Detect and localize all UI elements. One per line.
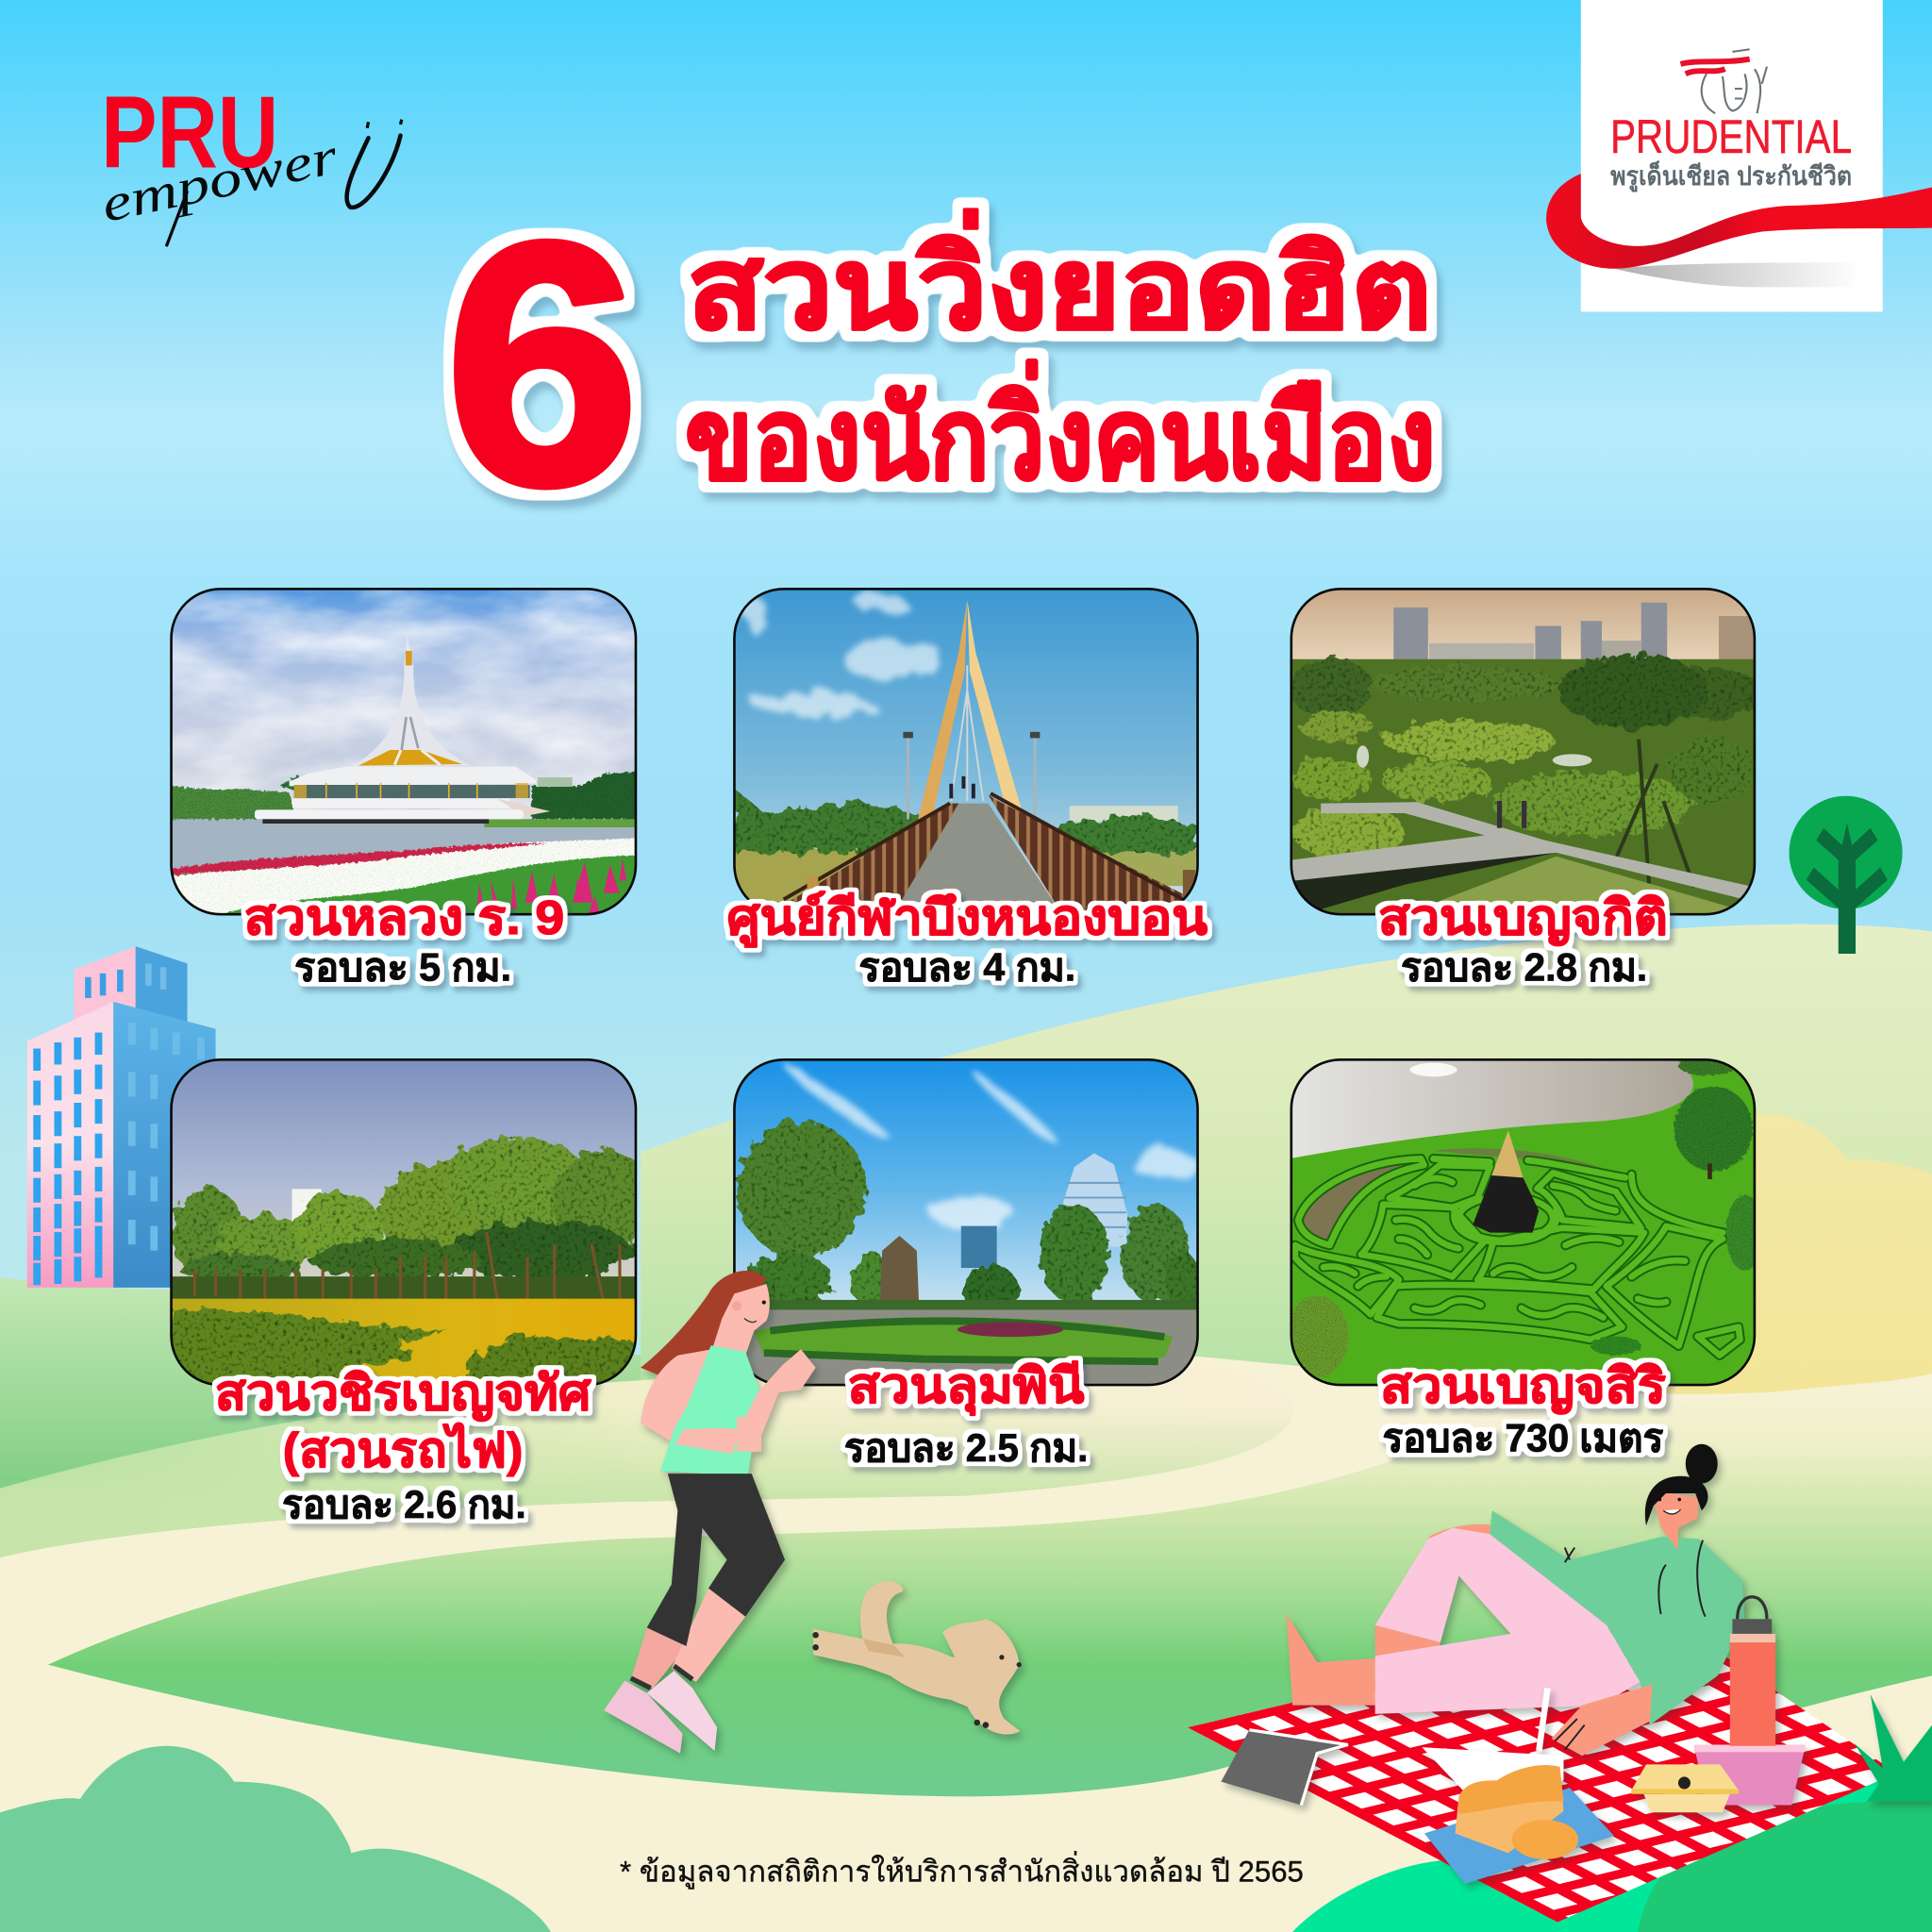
logo: PRU empower U xyxy=(96,75,402,246)
label: Wachirabenchathat xyxy=(215,1366,591,1526)
label: Benjasiri: รอบละ 730 เมตร xyxy=(1382,1416,1664,1460)
heading line 1: สวนวิ่งยอดฮิต xyxy=(688,208,1432,352)
label: Lumphini: สวนลุมพินี xyxy=(848,1358,1085,1415)
water bottle xyxy=(1730,1597,1775,1746)
label: Nong Bon: รอบละ 4 กม. xyxy=(858,945,1075,990)
label: Benjakitti xyxy=(1378,891,1668,990)
logo: Prudential: PRUDENTIAL xyxy=(1610,110,1852,163)
label: Nong Bon: ศูนย์กีฬาบึงหนองบอน xyxy=(727,891,1208,948)
icon: city buildings xyxy=(27,946,216,1288)
illustration: runner xyxy=(604,1271,816,1754)
label: Benjakitti: สวนเบญจกิติ xyxy=(1378,891,1668,945)
label: Lumphini: รอบละ 2.5 กม. xyxy=(844,1425,1088,1470)
illustration: picnic items xyxy=(1221,1597,1932,1884)
photo: Wachirabenchathat park xyxy=(170,1059,656,1385)
white paper and straw xyxy=(1422,1688,1563,1799)
label: Wachirabenchathat: (สวนรถไฟ) xyxy=(283,1422,523,1476)
bottom right hills xyxy=(1292,1779,1932,1932)
park labels row 2 xyxy=(215,1358,1667,1526)
big number 6: 6 xyxy=(445,172,640,557)
logo: Prudential: พรูเด็นเชียล ประกันชีวิต xyxy=(1610,159,1852,192)
plant xyxy=(1855,1694,1932,1802)
logo: PRU empower U: empower xyxy=(96,126,342,233)
yellow food box xyxy=(1631,1764,1739,1812)
park labels row 1 xyxy=(244,891,1668,990)
bread xyxy=(1456,1765,1578,1859)
label: Suan Luang Rama 9: รอบละ 5 กม. xyxy=(294,945,511,990)
label: Benjasiri xyxy=(1380,1358,1667,1460)
label: Wachirabenchathat: รอบละ 2.6 กม. xyxy=(282,1482,526,1526)
bush bottom left xyxy=(0,1746,551,1932)
logo: PRU empower U: PRU xyxy=(101,75,278,190)
photo: Suan Luang Rama 9 xyxy=(170,589,641,918)
logo: Prudential xyxy=(1546,0,1932,311)
icon: tree xyxy=(1789,796,1903,954)
title xyxy=(445,172,1436,557)
photo: Lumphini park xyxy=(734,1059,1200,1385)
label: Lumphini xyxy=(844,1358,1088,1470)
photo: Nong Bon sports centre bridge xyxy=(734,589,1198,914)
illustration: picnic woman xyxy=(1287,1444,1744,1756)
illustration: dog xyxy=(812,1581,1022,1735)
book xyxy=(1221,1730,1348,1805)
photo: Benjasiri park maze xyxy=(1286,1057,1764,1385)
lunch box xyxy=(1694,1744,1805,1805)
label: Suan Luang Rama 9 xyxy=(244,891,564,990)
label: Benjakitti: รอบละ 2.8 กม. xyxy=(1401,945,1647,990)
photo: Benjakitti park xyxy=(1289,589,1762,918)
label: Suan Luang Rama 9: สวนหลวง ร. 9 xyxy=(244,891,564,944)
logo ribbon xyxy=(1546,174,1932,287)
label: Wachirabenchathat: สวนวชิรเบญจทัศ xyxy=(215,1366,591,1421)
footnote: * ข้อมูลจากสถิติการให้บริการสำนักสิ่งแวดล้อม ปี 2565 xyxy=(620,1850,1304,1889)
heading line 2: ของนักวิ่งคนเมือง xyxy=(685,359,1436,503)
background hills and paths xyxy=(0,924,1932,1932)
blue mat xyxy=(1424,1788,1614,1884)
label: Nong Bon xyxy=(727,891,1208,990)
picnic cloth xyxy=(1188,1614,1896,1923)
label: Benjasiri: สวนเบญจสิริ xyxy=(1380,1358,1667,1413)
logo portrait xyxy=(1681,49,1767,113)
